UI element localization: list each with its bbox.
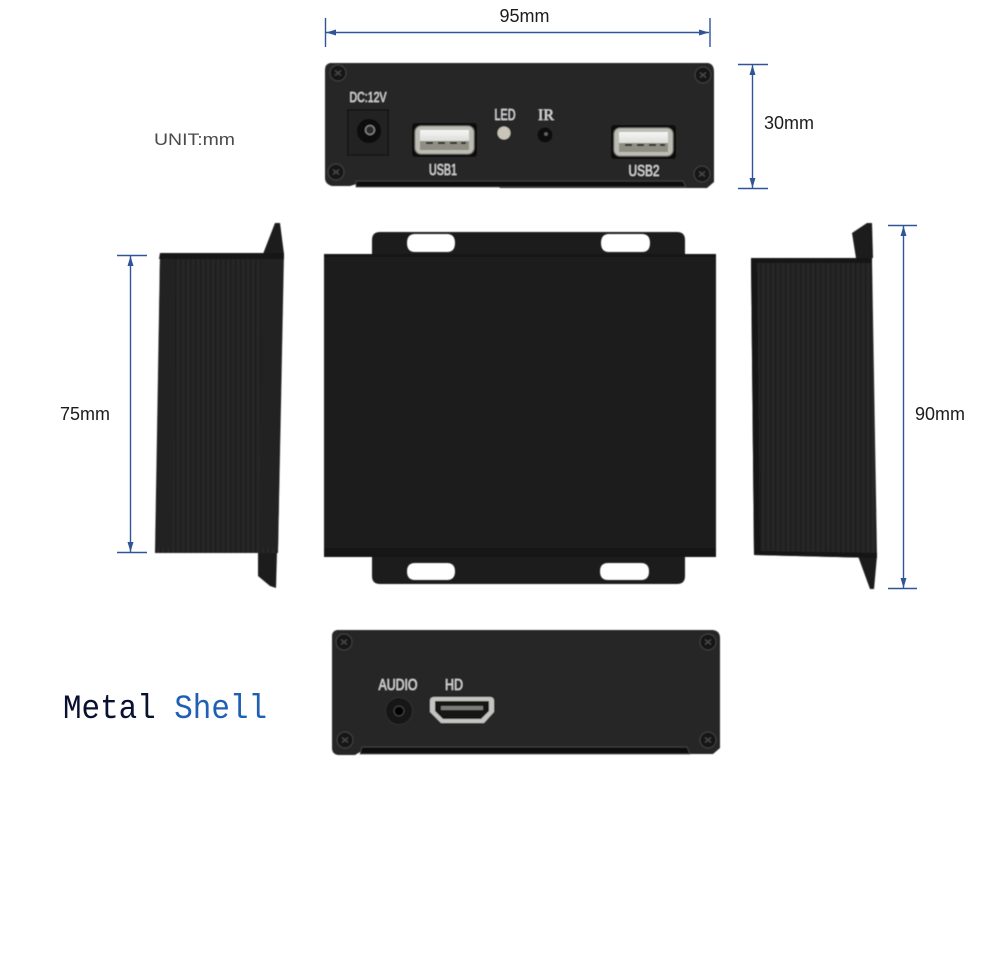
dimension: 95mm width: 95mm	[500, 6, 550, 26]
panel: front view	[325, 63, 714, 188]
left inner shade	[156, 259, 176, 548]
IR receiver: IR	[538, 107, 554, 124]
front housing	[325, 63, 714, 188]
audio jack	[378, 677, 418, 724]
LED indicator	[494, 107, 516, 140]
dimension: 75mm height: 75mm	[60, 404, 110, 424]
right top edge	[751, 258, 872, 263]
dimension: 30mm height: 30mm	[764, 113, 814, 133]
dimension: 75mm height	[60, 256, 147, 552]
rear housing	[332, 630, 720, 755]
LED indicator: LED	[494, 107, 516, 124]
HDMI port: HD	[445, 677, 463, 694]
panel: top view	[324, 232, 716, 584]
USB1 port	[412, 123, 477, 179]
right top bracket	[852, 223, 873, 258]
rear bottom lip	[360, 747, 690, 754]
right ribbed body	[751, 258, 877, 558]
unit note: UNIT:mm	[154, 130, 235, 149]
right bottom edge	[754, 551, 877, 558]
main body	[324, 254, 716, 557]
left flange shade	[259, 259, 283, 548]
body bottom edge	[324, 548, 716, 557]
panel: rear view	[332, 630, 720, 755]
bottom mounting tab	[372, 555, 685, 584]
HDMI port	[430, 677, 494, 723]
DC power jack: DC:12V	[350, 89, 386, 106]
front bottom lip	[356, 181, 686, 187]
top mounting tab	[372, 232, 685, 256]
left ribbed body	[155, 253, 284, 553]
dimension: 95mm width	[326, 6, 710, 47]
panel: right side view	[751, 223, 877, 589]
audio jack: AUDIO	[378, 677, 418, 694]
DC power jack	[348, 89, 388, 155]
right bottom bracket	[858, 556, 877, 589]
rear screws	[336, 634, 716, 748]
body top edge	[324, 254, 716, 257]
left top edge	[159, 253, 284, 259]
IR receiver	[538, 107, 554, 142]
USB2 port: USB2	[628, 163, 660, 180]
USB1 port: USB1	[429, 162, 457, 179]
dimension: 90mm height	[888, 226, 965, 588]
front screws	[328, 65, 711, 182]
dimension: 90mm height: 90mm	[915, 404, 965, 424]
product label: Metal Shell: Metal Shell	[63, 691, 267, 729]
left bottom bracket	[258, 552, 277, 588]
dimension: 30mm height	[738, 64, 814, 188]
USB2 port	[611, 125, 676, 180]
panel: left side view	[155, 223, 284, 588]
right inner shade	[751, 258, 760, 555]
left top bracket	[263, 223, 284, 254]
